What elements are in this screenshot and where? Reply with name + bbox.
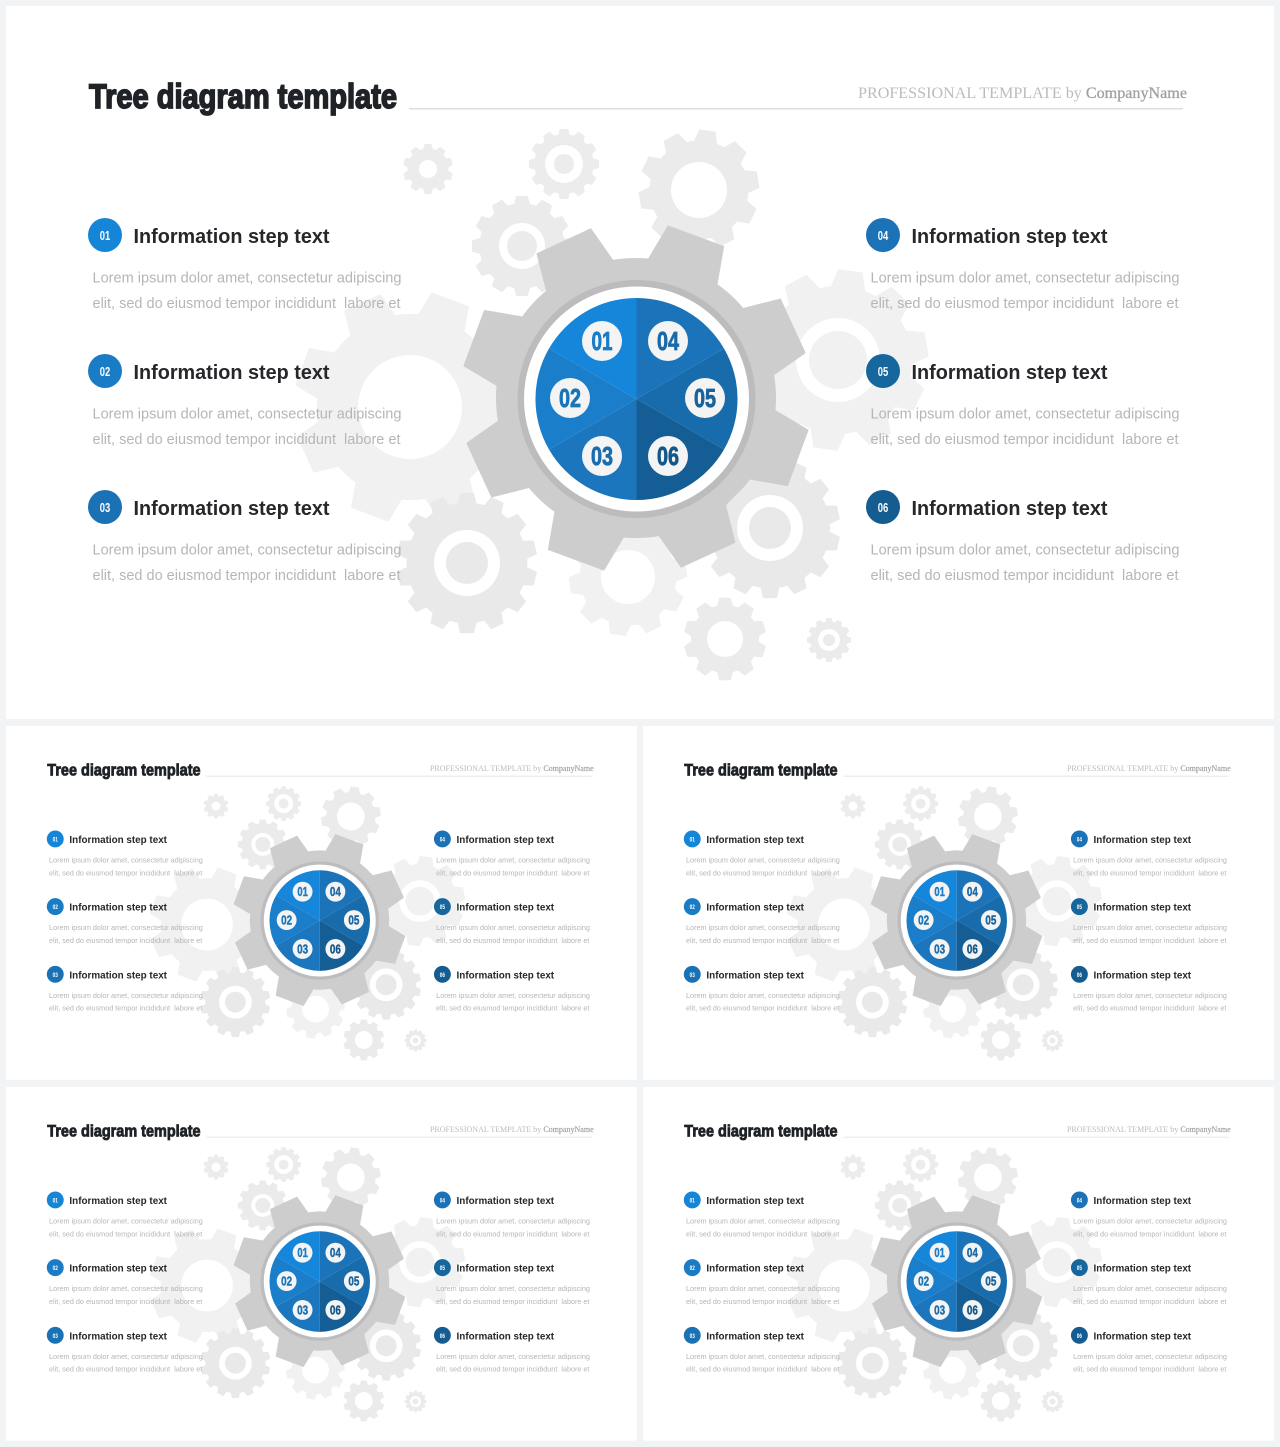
thumbnail step 06 [434, 1327, 590, 1374]
thumbnail wheel numbers [914, 1243, 1001, 1320]
thumbnail blue wheel [906, 1231, 1007, 1332]
thumbnail step 02: Information step text [706, 903, 805, 914]
panel: thumbnail slide bottom right [643, 1087, 1274, 1441]
thumbnail step 06: Lorem ipsum dolor amet, consectetur adipiscing [1073, 991, 1227, 1000]
thumbnail background gears [778, 783, 1108, 1061]
thumbnail step 04 [434, 1191, 590, 1238]
thumbnail step 06: 06 [440, 972, 445, 979]
thumbnail step 06: Information step text [1094, 1331, 1192, 1342]
thumbnail step 03: elit, sed do eiusmod tempor incididunt labore et [686, 1365, 840, 1374]
thumbnail step 05: 05 [1077, 1265, 1082, 1272]
step 03 [88, 490, 402, 584]
thumbnail step 04: Information step text [1094, 1196, 1192, 1207]
thumbnail wheel numbers: 05 [348, 913, 359, 928]
thumbnail wheel numbers [277, 882, 364, 959]
step 02: elit, sed do eiusmod tempor incididunt labore et [92, 431, 401, 448]
thumbnail step 01: elit, sed do eiusmod tempor incididunt labore et [49, 1229, 203, 1238]
thumbnail subtitle: PROFESSIONAL TEMPLATE by CompanyName [430, 1125, 594, 1134]
step 06 [866, 490, 1180, 584]
thumbnail step 05: 05 [440, 1265, 445, 1272]
thumbnail subtitle: PROFESSIONAL TEMPLATE by CompanyName [1067, 764, 1231, 773]
thumbnail step 01: elit, sed do eiusmod tempor incididunt labore et [686, 868, 840, 877]
thumbnail step 02: elit, sed do eiusmod tempor incididunt labore et [49, 936, 203, 945]
thumbnail wheel numbers: 06 [967, 1302, 978, 1317]
step 05: 05 [878, 364, 888, 379]
thumbnail step 06: elit, sed do eiusmod tempor incididunt labore et [436, 1004, 590, 1013]
thumbnail step 05: elit, sed do eiusmod tempor incididunt labore et [436, 1297, 590, 1306]
thumbnail step 05: Information step text [457, 903, 555, 914]
thumbnail step 06: elit, sed do eiusmod tempor incididunt labore et [1073, 1004, 1227, 1013]
thumbnail step 01: Lorem ipsum dolor amet, consectetur adipiscing [686, 1217, 840, 1226]
thumbnail main gear [219, 1181, 421, 1381]
step 03: Lorem ipsum dolor amet, consectetur adipiscing [92, 542, 402, 558]
thumbnail step 01 [684, 830, 840, 877]
step 04: elit, sed do eiusmod tempor incididunt labore et [870, 295, 1179, 312]
thumbnail step 04: Lorem ipsum dolor amet, consectetur adipiscing [436, 856, 590, 865]
background gears [277, 122, 941, 680]
step 04: Lorem ipsum dolor amet, consectetur adipiscing [870, 270, 1180, 286]
wheel numbers [550, 321, 725, 476]
thumbnail step 01: Lorem ipsum dolor amet, consectetur adipiscing [49, 856, 203, 865]
thumbnail step 02: Information step text [69, 1264, 168, 1275]
thumbnail step 04: Information step text [1094, 835, 1192, 846]
wheel numbers: 03 [591, 441, 613, 471]
wheel numbers: 05 [694, 383, 716, 413]
thumbnail wheel numbers: 02 [281, 913, 292, 928]
thumbnail step 02: 02 [690, 904, 695, 911]
thumbnail main gear [219, 820, 421, 1020]
thumbnail step 05 [1071, 1259, 1227, 1306]
thumbnail title: Tree diagram template [47, 761, 201, 780]
thumbnail step 04: Lorem ipsum dolor amet, consectetur adipiscing [436, 1217, 590, 1226]
wheel numbers: 06 [657, 441, 679, 471]
thumbnail step 01 [684, 1191, 840, 1238]
thumbnail step 02 [47, 1259, 203, 1306]
thumbnail step 05 [1071, 898, 1227, 945]
thumbnail step 01: Information step text [69, 835, 168, 846]
thumbnail step 03: 03 [690, 972, 695, 979]
thumbnail step 06: 06 [1077, 1333, 1082, 1340]
thumbnail step 03: elit, sed do eiusmod tempor incididunt labore et [49, 1004, 203, 1013]
thumbnail title: Tree diagram template [47, 1122, 201, 1141]
thumbnail wheel numbers: 03 [297, 1302, 308, 1317]
thumbnail step 06 [1071, 1327, 1227, 1374]
thumbnail step 02: Information step text [69, 903, 168, 914]
thumbnail title: Tree diagram template [684, 1122, 838, 1141]
thumbnail step 02: 02 [53, 1265, 58, 1272]
thumbnail step 05: elit, sed do eiusmod tempor incididunt labore et [436, 936, 590, 945]
thumbnail step 01 [47, 1191, 203, 1238]
thumbnail wheel numbers: 04 [330, 884, 342, 899]
thumbnail step 03: Information step text [69, 1331, 168, 1342]
thumbnail step 02: elit, sed do eiusmod tempor incididunt labore et [49, 1297, 203, 1306]
step 06: elit, sed do eiusmod tempor incididunt labore et [870, 567, 1179, 584]
wheel numbers: 02 [559, 383, 581, 413]
thumbnail step 04: elit, sed do eiusmod tempor incididunt labore et [436, 1229, 590, 1238]
step 05 [866, 354, 1180, 448]
step 01: elit, sed do eiusmod tempor incididunt labore et [92, 295, 401, 312]
thumbnail main gear [856, 820, 1058, 1020]
thumbnail step 01: Information step text [69, 1196, 168, 1207]
thumbnail step 06: Information step text [457, 1331, 555, 1342]
thumbnail step 04: Information step text [457, 835, 555, 846]
thumbnail step 04: 04 [440, 1197, 445, 1204]
thumbnail step 05: Lorem ipsum dolor amet, consectetur adipiscing [436, 1284, 590, 1293]
thumbnail step 03 [684, 966, 840, 1013]
thumbnail step 05: Lorem ipsum dolor amet, consectetur adipiscing [436, 923, 590, 932]
thumbnail step 03: Lorem ipsum dolor amet, consectetur adipiscing [686, 991, 840, 1000]
thumbnail step 03: Lorem ipsum dolor amet, consectetur adipiscing [686, 1352, 840, 1361]
thumbnail wheel numbers: 01 [934, 1245, 945, 1260]
thumbnail step 04: 04 [1077, 1197, 1082, 1204]
thumbnail step 05: Information step text [457, 1264, 555, 1275]
thumbnail main gear [856, 1181, 1058, 1381]
main gear [435, 197, 841, 599]
step 04: Information step text [912, 226, 1108, 248]
thumbnail step 04: 04 [440, 836, 445, 843]
thumbnail blue wheel [906, 870, 1007, 971]
thumbnail wheel numbers: 04 [967, 1245, 979, 1260]
step 01: Lorem ipsum dolor amet, consectetur adipiscing [92, 270, 402, 286]
thumbnail step 02: 02 [53, 904, 58, 911]
thumbnail step 06: Lorem ipsum dolor amet, consectetur adipiscing [1073, 1352, 1227, 1361]
thumbnail step 03 [47, 966, 203, 1013]
thumbnail step 04: Information step text [457, 1196, 555, 1207]
thumbnail wheel numbers: 06 [330, 1302, 341, 1317]
step 03: elit, sed do eiusmod tempor incididunt labore et [92, 567, 401, 584]
step 02: Lorem ipsum dolor amet, consectetur adipiscing [92, 406, 402, 422]
thumbnail step 04 [1071, 1191, 1227, 1238]
thumbnail step 03 [684, 1327, 840, 1374]
step 03: 03 [100, 500, 110, 515]
thumbnail step 03: Lorem ipsum dolor amet, consectetur adipiscing [49, 1352, 203, 1361]
thumbnail wheel numbers: 01 [934, 884, 945, 899]
thumbnail wheel numbers: 04 [330, 1245, 342, 1260]
thumbnail step 06: Information step text [1094, 970, 1192, 981]
thumbnail step 05: Lorem ipsum dolor amet, consectetur adipiscing [1073, 923, 1227, 932]
thumbnail step 06 [434, 966, 590, 1013]
thumbnail step 01 [47, 830, 203, 877]
thumbnail step 05: 05 [440, 904, 445, 911]
blue segmented wheel [535, 298, 738, 500]
thumbnail background gears [778, 1144, 1108, 1422]
thumbnail step 03: 03 [690, 1333, 695, 1340]
thumbnail step 05: elit, sed do eiusmod tempor incididunt labore et [1073, 936, 1227, 945]
thumbnail step 03: elit, sed do eiusmod tempor incididunt labore et [686, 1004, 840, 1013]
thumbnail wheel numbers: 03 [297, 941, 308, 956]
thumbnail step 04: Lorem ipsum dolor amet, consectetur adipiscing [1073, 856, 1227, 865]
thumbnail step 03: 03 [53, 1333, 58, 1340]
thumbnail blue wheel [269, 1231, 370, 1332]
thumbnail wheel numbers [277, 1243, 364, 1320]
thumbnail wheel numbers: 03 [934, 1302, 945, 1317]
thumbnail wheel numbers: 01 [297, 884, 308, 899]
thumbnail wheel numbers: 05 [985, 913, 996, 928]
thumbnail step 05: Information step text [1094, 1264, 1192, 1275]
thumbnail wheel numbers: 05 [348, 1274, 359, 1289]
thumbnail step 06: 06 [440, 1333, 445, 1340]
thumbnail step 06 [1071, 966, 1227, 1013]
thumbnail step 03: 03 [53, 972, 58, 979]
thumbnail step 05: Information step text [1094, 903, 1192, 914]
thumbnail step 04: elit, sed do eiusmod tempor incididunt labore et [436, 868, 590, 877]
step 06: Information step text [912, 498, 1108, 520]
title: Tree diagram template [89, 78, 397, 116]
thumbnail title: Tree diagram template [684, 761, 838, 780]
thumbnail step 01: Information step text [706, 1196, 805, 1207]
thumbnail step 02: Lorem ipsum dolor amet, consectetur adipiscing [49, 923, 203, 932]
step 01: 01 [100, 228, 110, 243]
thumbnail step 02: Lorem ipsum dolor amet, consectetur adipiscing [686, 1284, 840, 1293]
thumbnail step 01: Information step text [706, 835, 805, 846]
panel: thumbnail slide top left [6, 726, 637, 1080]
thumbnail step 01: Lorem ipsum dolor amet, consectetur adipiscing [49, 1217, 203, 1226]
thumbnail step 02: elit, sed do eiusmod tempor incididunt labore et [686, 1297, 840, 1306]
panel: main slide [6, 6, 1274, 719]
thumbnail step 04: 04 [1077, 836, 1082, 843]
step 03: Information step text [134, 498, 330, 520]
thumbnail wheel numbers: 01 [297, 1245, 308, 1260]
step 06: Lorem ipsum dolor amet, consectetur adipiscing [870, 542, 1180, 558]
thumbnail step 06: 06 [1077, 972, 1082, 979]
thumbnail step 02: elit, sed do eiusmod tempor incididunt labore et [686, 936, 840, 945]
thumbnail step 02: Lorem ipsum dolor amet, consectetur adipiscing [49, 1284, 203, 1293]
step 06: 06 [878, 500, 888, 515]
thumbnail step 06: elit, sed do eiusmod tempor incididunt labore et [436, 1365, 590, 1374]
thumbnail step 01: elit, sed do eiusmod tempor incididunt labore et [686, 1229, 840, 1238]
thumbnail step 06: Lorem ipsum dolor amet, consectetur adipiscing [436, 991, 590, 1000]
thumbnail wheel numbers: 06 [967, 941, 978, 956]
thumbnail step 04: elit, sed do eiusmod tempor incididunt labore et [1073, 1229, 1227, 1238]
wheel numbers: 04 [657, 326, 679, 356]
thumbnail step 04: elit, sed do eiusmod tempor incididunt labore et [1073, 868, 1227, 877]
thumbnail step 04 [434, 830, 590, 877]
thumbnail step 02: 02 [690, 1265, 695, 1272]
wheel numbers: 01 [592, 326, 612, 356]
thumbnail step 05: elit, sed do eiusmod tempor incididunt labore et [1073, 1297, 1227, 1306]
thumbnail step 01: 01 [690, 1197, 695, 1204]
thumbnail step 01: 01 [53, 836, 58, 843]
thumbnail wheel numbers: 06 [330, 941, 341, 956]
thumbnail step 01: Lorem ipsum dolor amet, consectetur adipiscing [686, 856, 840, 865]
thumbnail step 05 [434, 1259, 590, 1306]
thumbnail subtitle: PROFESSIONAL TEMPLATE by CompanyName [430, 764, 594, 773]
step 02 [88, 354, 402, 448]
step 05: Lorem ipsum dolor amet, consectetur adipiscing [870, 406, 1180, 422]
thumbnail wheel numbers: 02 [918, 1274, 929, 1289]
thumbnail step 02: Lorem ipsum dolor amet, consectetur adipiscing [686, 923, 840, 932]
step 01 [88, 218, 402, 312]
header subtitle: PROFESSIONAL TEMPLATE by CompanyName [858, 85, 1187, 102]
panel: thumbnail slide top right [643, 726, 1274, 1080]
thumbnail step 03: elit, sed do eiusmod tempor incididunt labore et [49, 1365, 203, 1374]
thumbnail wheel numbers: 02 [918, 913, 929, 928]
step 04 [866, 218, 1180, 312]
thumbnail step 03: Information step text [706, 970, 805, 981]
thumbnail step 06: Lorem ipsum dolor amet, consectetur adipiscing [436, 1352, 590, 1361]
thumbnail step 03: Information step text [69, 970, 168, 981]
thumbnail step 05: 05 [1077, 904, 1082, 911]
thumbnail step 02: Information step text [706, 1264, 805, 1275]
thumbnail step 01: 01 [690, 836, 695, 843]
step 02: Information step text [134, 362, 330, 384]
thumbnail wheel numbers: 04 [967, 884, 979, 899]
step 05: Information step text [912, 362, 1108, 384]
step 02: 02 [100, 364, 110, 379]
thumbnail wheel numbers: 03 [934, 941, 945, 956]
thumbnail step 03: Lorem ipsum dolor amet, consectetur adipiscing [49, 991, 203, 1000]
thumbnail step 01: 01 [53, 1197, 58, 1204]
step 05: elit, sed do eiusmod tempor incididunt labore et [870, 431, 1179, 448]
thumbnail step 02 [684, 1259, 840, 1306]
thumbnail step 02 [684, 898, 840, 945]
thumbnail step 01: elit, sed do eiusmod tempor incididunt labore et [49, 868, 203, 877]
thumbnail step 05 [434, 898, 590, 945]
thumbnail step 03: Information step text [706, 1331, 805, 1342]
thumbnail wheel numbers [914, 882, 1001, 959]
thumbnail step 05: Lorem ipsum dolor amet, consectetur adipiscing [1073, 1284, 1227, 1293]
thumbnail step 04: Lorem ipsum dolor amet, consectetur adipiscing [1073, 1217, 1227, 1226]
thumbnail wheel numbers: 02 [281, 1274, 292, 1289]
step 04: 04 [878, 228, 889, 243]
thumbnail step 03 [47, 1327, 203, 1374]
thumbnail background gears [141, 783, 471, 1061]
thumbnail step 02 [47, 898, 203, 945]
thumbnail background gears [141, 1144, 471, 1422]
step 01: Information step text [134, 226, 330, 248]
thumbnail step 04 [1071, 830, 1227, 877]
thumbnail blue wheel [269, 870, 370, 971]
thumbnail step 06: elit, sed do eiusmod tempor incididunt labore et [1073, 1365, 1227, 1374]
thumbnail step 06: Information step text [457, 970, 555, 981]
thumbnail wheel numbers: 05 [985, 1274, 996, 1289]
panel: thumbnail slide bottom left [6, 1087, 637, 1441]
thumbnail subtitle: PROFESSIONAL TEMPLATE by CompanyName [1067, 1125, 1231, 1134]
